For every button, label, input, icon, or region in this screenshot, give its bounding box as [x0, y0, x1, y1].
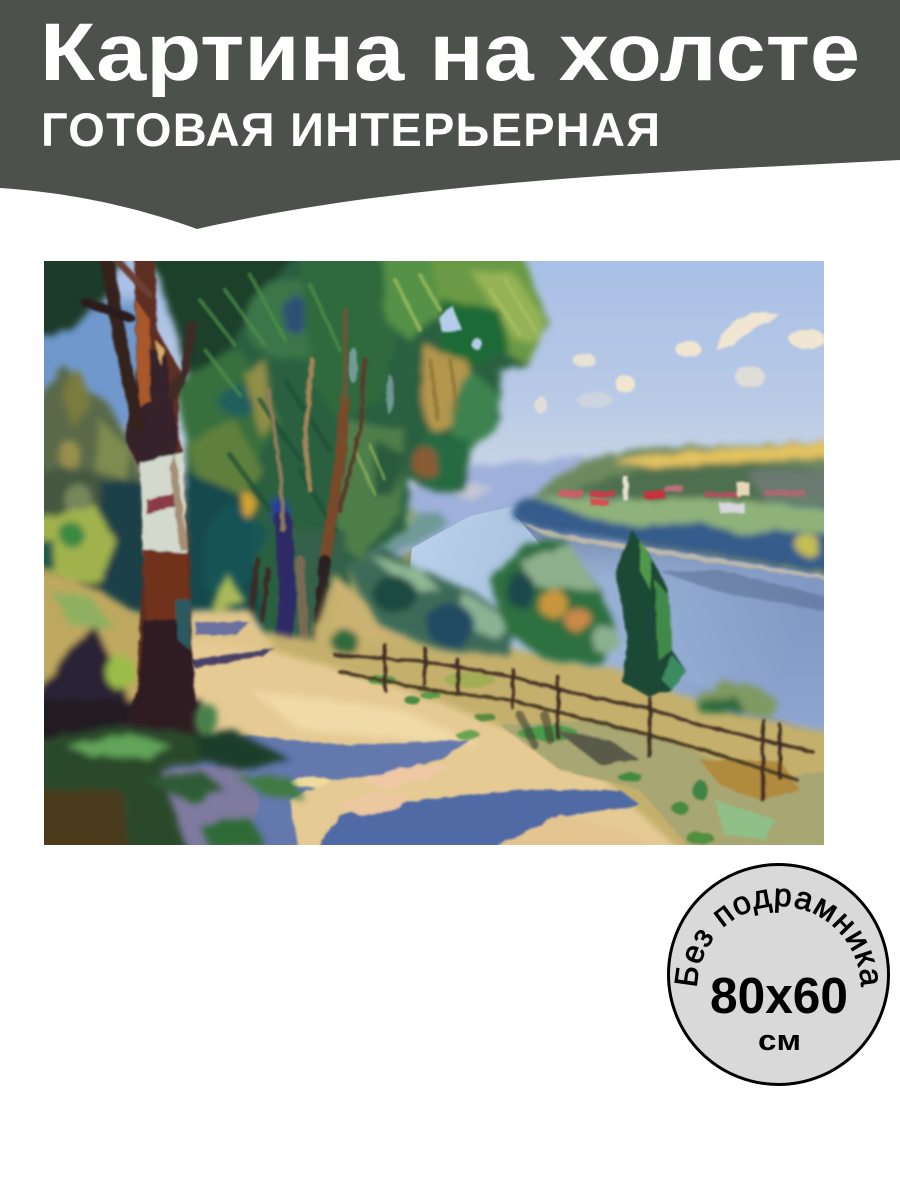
subtitle: ГОТОВАЯ ИНТЕРЬЕРНАЯ [41, 103, 660, 156]
far bank with village [513, 442, 840, 582]
poplar tree [615, 530, 685, 697]
left grassy bank [44, 564, 206, 744]
sky gaps in foliage [348, 305, 482, 415]
painting: river landscape [30, 250, 840, 860]
river [400, 506, 830, 740]
tree branches [85, 255, 192, 425]
path shadow strip [190, 622, 275, 668]
sandy path [192, 643, 678, 845]
badge: size and no stretcher [667, 863, 890, 1086]
distant hills [376, 453, 591, 560]
dappled shadow on path [159, 734, 640, 845]
upper-left tree and forest [44, 261, 146, 616]
middle tree trunks [250, 310, 365, 650]
badge curved text: Без подрамника [674, 888, 878, 988]
badge unit: см [758, 1025, 801, 1057]
background slope and grass [190, 570, 824, 845]
clouds [535, 312, 825, 414]
main tree foliage mass [140, 250, 548, 640]
foreground plants [44, 700, 309, 845]
badge size: 80х60 [710, 967, 848, 1024]
header banner [0, 0, 900, 229]
big foreground tree trunk [118, 255, 200, 735]
title: Картина на холсте [40, 7, 860, 98]
riverside bushes [345, 540, 778, 720]
foliage brush strokes [200, 275, 535, 530]
sky [44, 261, 824, 732]
grass slope right of path [367, 672, 824, 845]
split-rail fence [335, 645, 813, 800]
